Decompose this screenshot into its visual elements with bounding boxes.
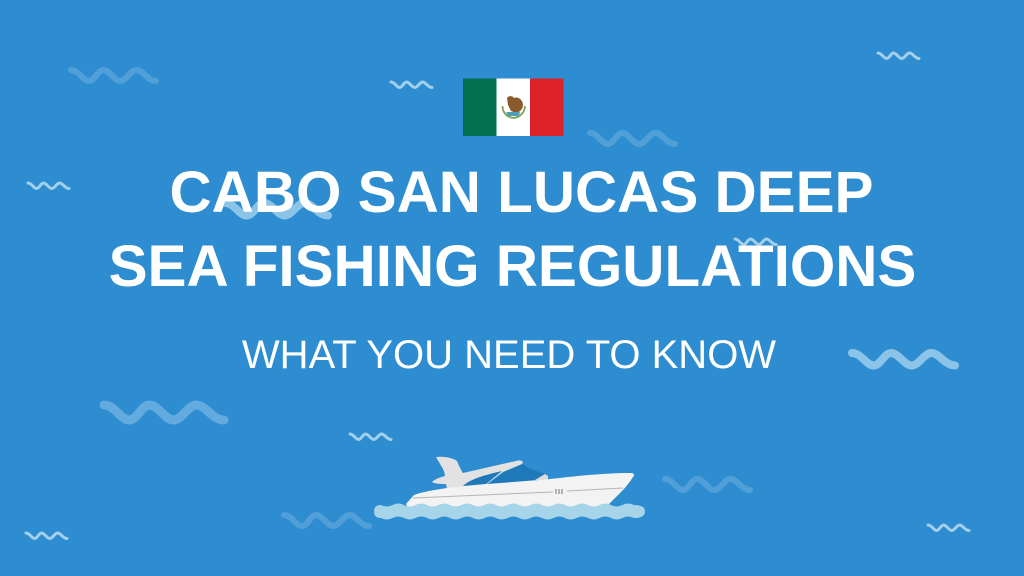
boat hull line: [413, 488, 623, 498]
wave: small left: [28, 183, 69, 188]
wave: large left: [104, 405, 224, 420]
icon: Mexican flag: [463, 78, 564, 136]
title: CABO SAN LUCAS DEEP: [170, 160, 874, 225]
wave: small top centre: [391, 82, 432, 88]
boat superstructure edge: [535, 474, 548, 480]
wave: right of boat: [665, 479, 750, 490]
wave: top left: [71, 70, 156, 81]
wave: behind title: [225, 203, 328, 216]
boat windshield: [488, 464, 547, 484]
wave: small above boat: [350, 434, 391, 440]
icon: coat of arms: [502, 96, 525, 118]
boat fin and arch: [432, 457, 523, 489]
title: SEA FISHING REGULATIONS: [109, 234, 916, 299]
wave: small behind title right: [735, 239, 776, 244]
wave: left of boat: [284, 515, 369, 526]
boat front window: [463, 471, 502, 486]
boat hull: [406, 473, 634, 512]
wave: small bottom left: [26, 533, 67, 538]
boat vents: [556, 489, 562, 494]
subtitle: WHAT YOU NEED TO KNOW: [242, 333, 776, 377]
wave: small top right: [878, 53, 919, 58]
icon: yacht: [374, 457, 645, 520]
wave: large right: [852, 353, 955, 366]
wave: below flag: [590, 133, 675, 144]
wave: small bottom right: [928, 525, 969, 530]
title: [109, 160, 916, 299]
water under boat: [374, 504, 645, 520]
